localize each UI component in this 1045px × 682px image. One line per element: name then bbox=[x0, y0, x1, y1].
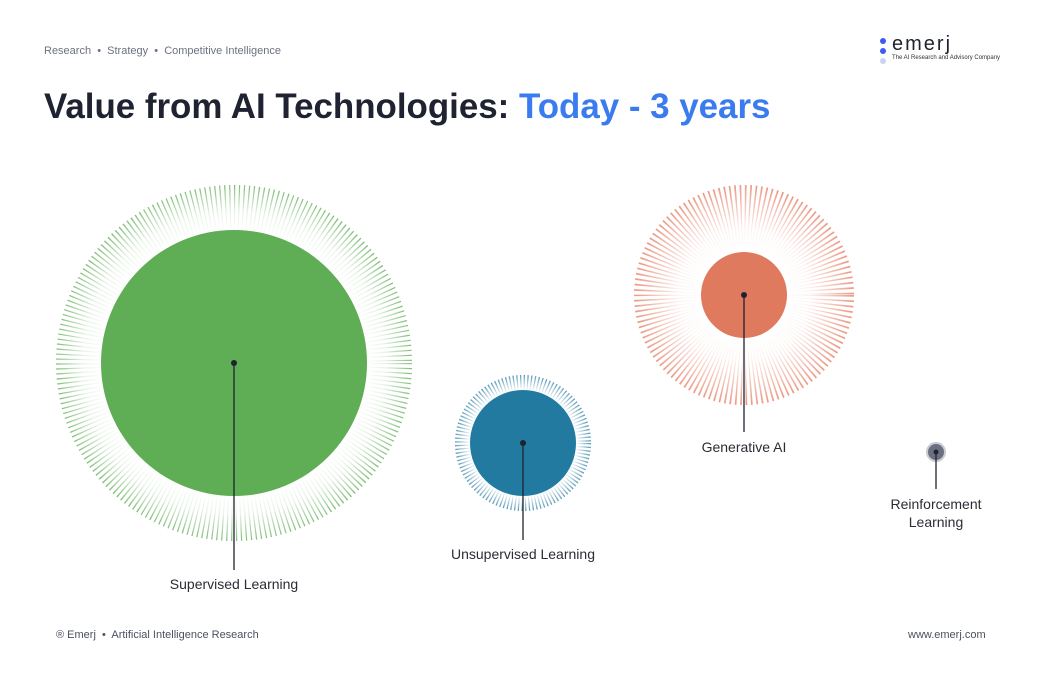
breadcrumb: Research • Strategy • Competitive Intelligence bbox=[44, 45, 281, 57]
logo wordmark: emerj bbox=[892, 33, 952, 55]
bubble: reinforcement learning bbox=[926, 442, 946, 489]
icon: logo dots bbox=[880, 38, 886, 64]
bubble: supervised learning bbox=[56, 185, 412, 570]
bubble: generative AI bbox=[634, 185, 854, 432]
logo bbox=[880, 33, 1000, 64]
label: unsupervised learning: Unsupervised Learning bbox=[451, 546, 595, 562]
label: generative AI: Generative AI bbox=[702, 439, 786, 455]
logo: The AI Research and Advisory Company bbox=[892, 55, 1000, 61]
footer left: ® Emerj • Artificial Intelligence Research bbox=[56, 629, 259, 641]
label: supervised learning: Supervised Learning bbox=[170, 576, 298, 592]
label: reinforcement learning: Reinforcement bbox=[890, 496, 982, 512]
label: reinforcement learning: Learning bbox=[909, 514, 963, 530]
title: Value from AI Technologies: Today - 3 years bbox=[44, 87, 770, 126]
label: reinforcement learning bbox=[890, 496, 982, 530]
footer right: www.emerj.com bbox=[908, 629, 986, 641]
bubble: unsupervised learning bbox=[455, 375, 591, 540]
